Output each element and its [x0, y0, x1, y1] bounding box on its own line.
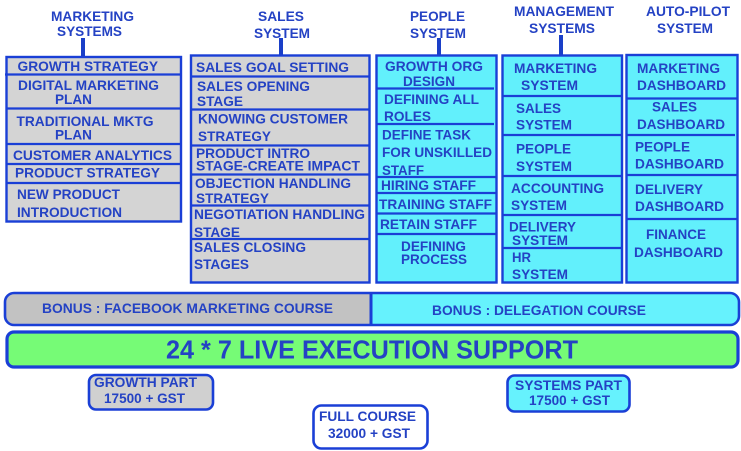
item: negotiation handling stage [194, 206, 365, 240]
item: objection handling strategy: OBJECTION HANDLING [195, 175, 351, 191]
item: accounting system: SYSTEM [511, 197, 567, 213]
panel: marketing systems [5, 57, 182, 222]
item: hr system: SYSTEM [512, 266, 568, 282]
item: sales closing stages: STAGES [194, 256, 249, 272]
item: product intro stage [196, 145, 360, 174]
item: retain staff: RETAIN STAFF [380, 216, 477, 232]
item: sales goal setting: SALES GOAL SETTING [196, 59, 349, 75]
item: knowing customer strategy: STRATEGY [198, 128, 272, 144]
item: hr system: HR [512, 249, 531, 265]
item: new product introduction: INTRODUCTION [17, 204, 122, 220]
price box: growth part: 17500 + GST [104, 391, 186, 406]
heading: auto-pilot system: SYSTEM [657, 20, 713, 36]
panel: sales system [191, 56, 370, 282]
price box: growth part: GROWTH PART [94, 375, 198, 390]
item: digital marketing plan: DIGITAL MARKETING [18, 77, 159, 93]
bonus: facebook marketing course: BONUS : FACEBOOK MARKETING COURSE [42, 300, 333, 316]
item: sales dashboard: SALES [652, 98, 697, 114]
item: objection handling strategy: STRATEGY [196, 190, 270, 206]
item: sales system: SYSTEM [516, 116, 572, 132]
item: new product introduction: NEW PRODUCT [17, 186, 120, 202]
item: defining all roles [384, 91, 479, 124]
price box: full course [314, 406, 428, 448]
item: growth strategy: GROWTH STRATEGY [18, 58, 159, 74]
heading: marketing systems: MARKETING [51, 8, 134, 24]
item: defining process [401, 238, 467, 267]
item: sales opening stage: SALES OPENING [197, 78, 310, 94]
item: delivery dashboard [635, 181, 724, 214]
heading: sales system [254, 8, 310, 41]
item: sales opening stage [197, 78, 310, 109]
item: growth org design: DESIGN [403, 73, 455, 89]
item: delivery dashboard: DASHBOARD [635, 198, 724, 214]
item: finance dashboard [634, 226, 723, 260]
item: sales opening stage: STAGE [197, 93, 243, 109]
connector: sales system [279, 38, 283, 55]
item: sales closing stages [194, 239, 306, 272]
item: people dashboard: PEOPLE [635, 138, 690, 154]
connector: management systems [559, 35, 563, 55]
item: marketing dashboard: MARKETING [637, 60, 720, 76]
item: accounting system [511, 180, 604, 213]
item: delivery system: DELIVERY [509, 218, 577, 234]
item: delivery system [509, 218, 577, 248]
item: objection handling strategy [195, 175, 351, 206]
item: product strategy: PRODUCT STRATEGY [15, 164, 161, 180]
bonus bar [5, 292, 739, 326]
item: sales dashboard: DASHBOARD [637, 116, 725, 132]
item: people dashboard [635, 138, 724, 172]
item: sales system [516, 100, 572, 132]
item: product intro stage: STAGE-CREATE IMPACT [196, 158, 360, 174]
item: hiring staff: HIRING STAFF [381, 177, 476, 193]
item: marketing dashboard [637, 60, 726, 93]
connector: marketing systems [81, 38, 85, 56]
item: negotiation handling stage: STAGE [194, 224, 240, 240]
item: marketing dashboard: DASHBOARD [637, 77, 726, 93]
heading: management systems: SYSTEMS [529, 20, 595, 36]
item: marketing system [514, 60, 597, 93]
heading: management systems: MANAGEMENT [514, 3, 614, 19]
connector: people system [437, 38, 441, 55]
price box: systems part: SYSTEMS PART [515, 378, 623, 393]
panel: people system [376, 56, 497, 282]
bonus: delegation course: BONUS : DELEGATION COURSE [432, 302, 646, 318]
item: defining process: DEFINING [401, 238, 466, 254]
item: defining process: PROCESS [401, 251, 467, 267]
item: traditional mktg plan: PLAN [55, 126, 92, 142]
price box: systems part [508, 376, 630, 412]
banner: live execution support [7, 332, 738, 367]
item: hr system [512, 249, 568, 282]
item: people system: PEOPLE [516, 140, 571, 156]
item: sales closing stages: SALES CLOSING [194, 239, 306, 255]
item: define task for unskilled staff [382, 126, 492, 178]
item: new product introduction [17, 186, 122, 220]
heading: auto-pilot system [646, 3, 730, 36]
item: traditional mktg plan: TRADITIONAL MKTG [16, 113, 154, 129]
item: people system [516, 140, 572, 174]
item: defining all roles: DEFINING ALL [384, 91, 479, 107]
panel: auto-pilot system [626, 55, 738, 282]
item: delivery system: SYSTEM [512, 232, 568, 248]
item: digital marketing plan [18, 77, 159, 107]
price box: full course: FULL COURSE [319, 409, 416, 424]
item: define task for unskilled staff: STAFF [382, 162, 424, 178]
item: define task for unskilled staff: FOR UNSKILLED [382, 144, 492, 160]
price box: systems part: 17500 + GST [529, 393, 611, 408]
item: product intro stage: PRODUCT INTRO [196, 145, 310, 161]
heading: people system: PEOPLE [410, 8, 465, 24]
heading: auto-pilot system: AUTO-PILOT [646, 3, 730, 19]
heading: marketing systems: SYSTEMS [57, 23, 122, 39]
item: finance dashboard: FINANCE [646, 226, 706, 242]
price box: full course: 32000 + GST [328, 426, 411, 441]
item: people dashboard: DASHBOARD [635, 156, 724, 172]
bonus: facebook marketing course [5, 293, 371, 325]
bonus: delegation course [371, 293, 739, 325]
item: finance dashboard: DASHBOARD [634, 244, 723, 260]
price box: growth part [89, 375, 213, 410]
heading: marketing systems [51, 8, 134, 39]
item: traditional mktg plan [16, 113, 154, 142]
heading: management systems [514, 3, 614, 36]
item: marketing system: MARKETING [514, 60, 597, 76]
panel: management systems [502, 56, 622, 282]
item: training staff: TRAINING STAFF [379, 196, 492, 212]
banner: live execution support: 24 * 7 LIVE EXECUTION SUPPORT [166, 334, 578, 364]
item: growth org design [385, 58, 483, 89]
heading: people system [410, 8, 466, 41]
item: digital marketing plan: PLAN [55, 91, 92, 107]
item: people system: SYSTEM [516, 158, 572, 174]
item: define task for unskilled staff: DEFINE TASK [382, 126, 471, 142]
heading: sales system: SALES [258, 8, 304, 24]
item: accounting system: ACCOUNTING [511, 180, 604, 196]
item: negotiation handling stage: NEGOTIATION HANDLING [194, 206, 365, 222]
item: defining all roles: ROLES [384, 108, 431, 124]
item: growth org design: GROWTH ORG [385, 58, 483, 74]
heading: people system: SYSTEM [410, 25, 466, 41]
item: knowing customer strategy: KNOWING CUSTOMER [198, 110, 348, 126]
item: knowing customer strategy [198, 110, 348, 144]
item: sales dashboard [637, 98, 725, 132]
item: customer analytics: CUSTOMER ANALYTICS [13, 147, 172, 163]
item: marketing system: SYSTEM [521, 77, 578, 93]
heading: sales system: SYSTEM [254, 25, 310, 41]
item: delivery dashboard: DELIVERY [635, 181, 704, 197]
item: sales system: SALES [516, 100, 561, 116]
